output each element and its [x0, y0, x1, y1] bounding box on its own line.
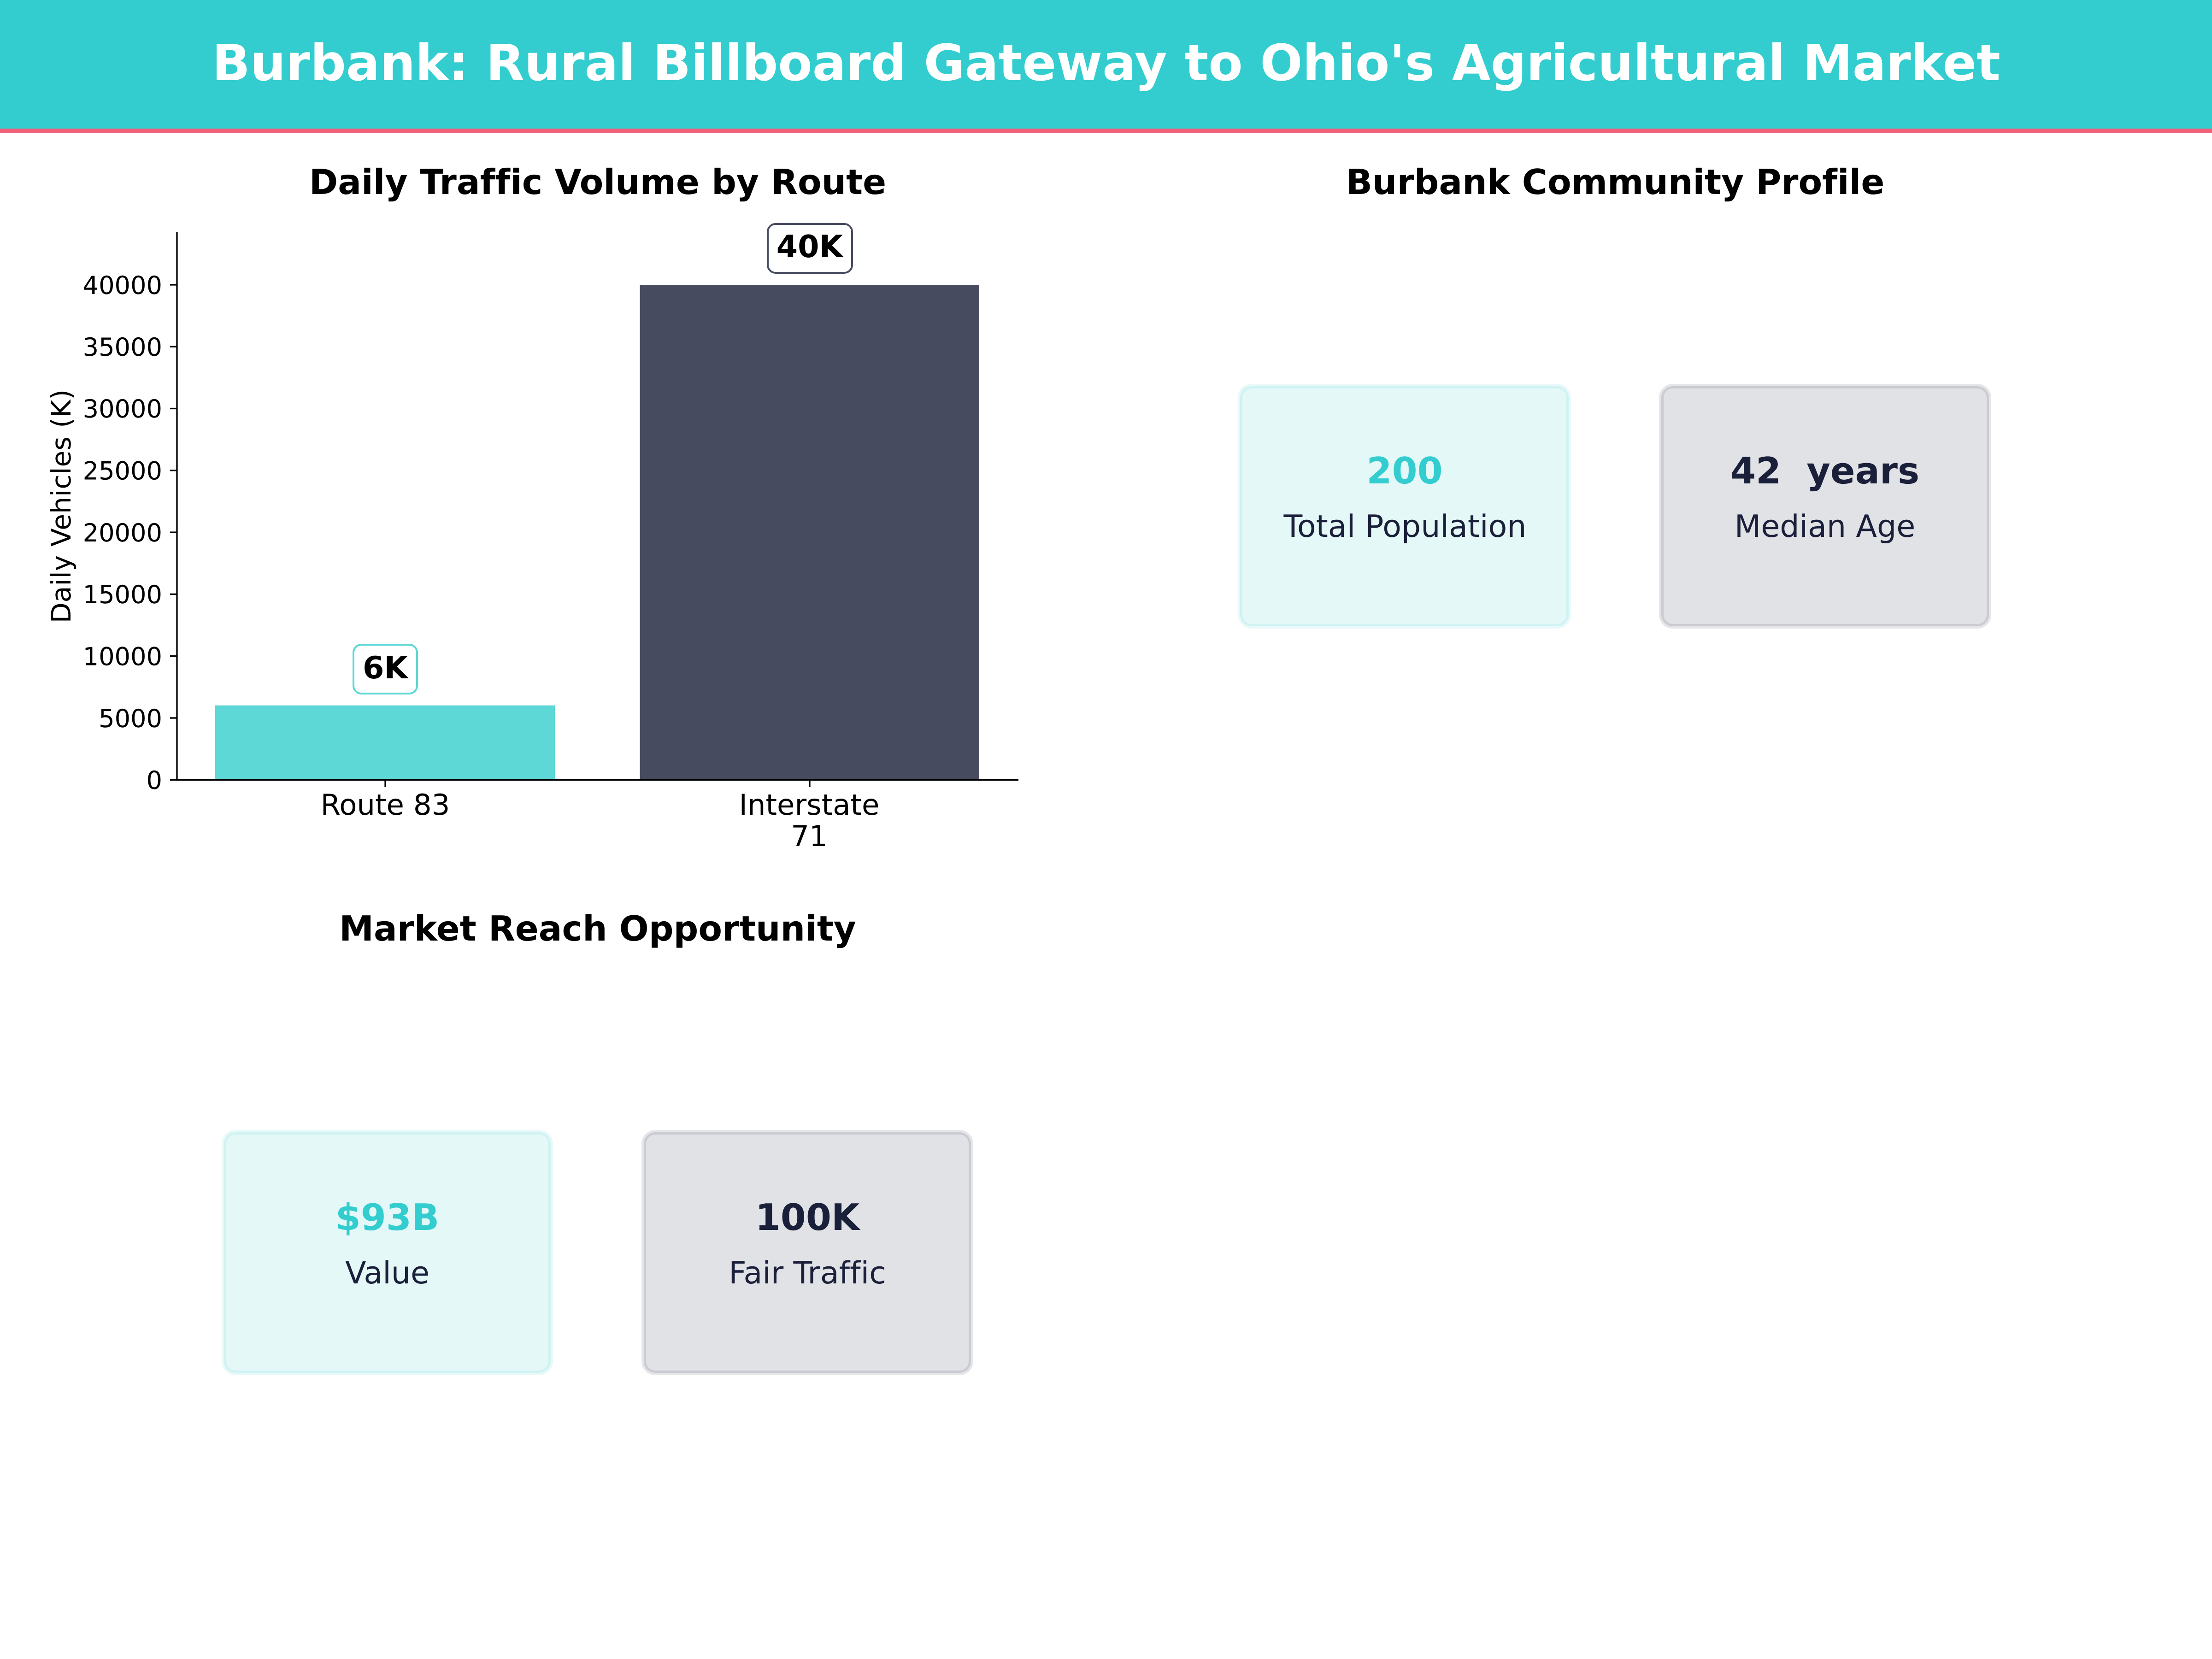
x axis: 71 — [791, 819, 828, 853]
y axis — [83, 232, 177, 795]
card: total population: 200 — [1366, 450, 1443, 492]
panel: daily traffic volume bar chart — [46, 162, 1018, 853]
card: value: $93B — [335, 1196, 439, 1239]
card: value: Value — [345, 1255, 429, 1291]
value label: 6K — [353, 645, 417, 694]
header banner — [0, 0, 2212, 133]
card: total population — [1240, 386, 1569, 626]
card: median age: Median Age — [1735, 508, 1915, 544]
y axis: 10000 — [83, 642, 162, 671]
y axis: 20000 — [83, 518, 162, 547]
x axis: Interstate — [739, 788, 880, 822]
y axis: 30000 — [83, 394, 162, 424]
card: total population: Total Population — [1283, 508, 1527, 544]
card: median age — [1661, 386, 1989, 626]
card: median age: 42 years — [1730, 450, 1919, 492]
card: fair traffic — [644, 1132, 971, 1373]
card: value — [224, 1132, 551, 1373]
panel: market reach opportunity — [224, 908, 971, 1373]
heading: daily traffic volume: Daily Traffic Volume by Route — [309, 162, 886, 202]
bar: Interstate 71 — [640, 285, 979, 780]
y axis label: Daily Vehicles (K) — [46, 389, 77, 623]
value label: 6K: 6K — [363, 650, 409, 686]
y axis: 15000 — [83, 580, 162, 609]
heading: market reach opportunity: Market Reach Opportunity — [339, 908, 856, 949]
title: Burbank: Rural Billboard Gateway to Ohio's Agricultural Market — [212, 34, 2000, 92]
value label: 40K: 40K — [777, 229, 844, 265]
y axis: 0 — [147, 766, 162, 795]
card: fair traffic: 100K — [755, 1196, 861, 1239]
y axis: 40000 — [83, 271, 162, 300]
y axis: 5000 — [99, 704, 162, 733]
x axis: Route 83 — [321, 788, 450, 822]
y axis: 35000 — [83, 333, 162, 362]
value label: 40K — [768, 224, 852, 273]
panel: community profile — [1240, 162, 1989, 626]
y axis: 25000 — [83, 456, 162, 486]
bar: Route 83 — [215, 706, 555, 780]
x axis — [176, 780, 1018, 853]
card: fair traffic: Fair Traffic — [729, 1255, 886, 1291]
heading: community profile: Burbank Community Profile — [1346, 162, 1884, 202]
